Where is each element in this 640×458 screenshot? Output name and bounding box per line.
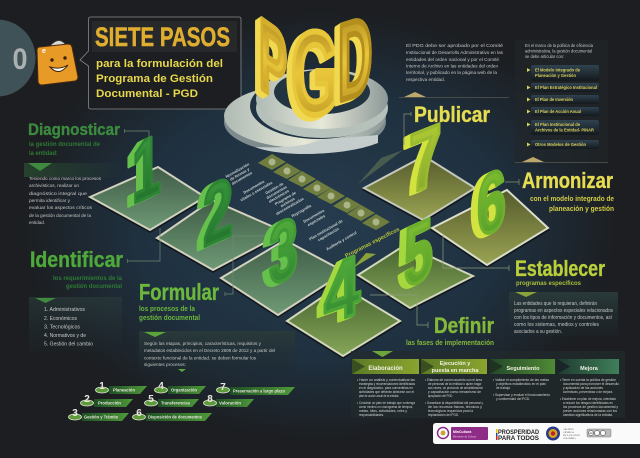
labels: specific programs: documentos	[265, 184, 288, 200]
step 4: Definir: Definir	[434, 313, 494, 338]
panel: establecer: Las entidades que lo requieran, definirán	[514, 301, 597, 307]
panel: formular	[139, 331, 295, 372]
panel: articulation list: Archivos de la Entidad- PINAR	[535, 128, 594, 132]
panel: articulation list: Otros Modelos de Gestión	[535, 142, 586, 147]
step 2: Identificar: Identificar	[30, 247, 123, 272]
step 7: Publicar	[404, 102, 490, 145]
process tags: 8	[207, 394, 213, 405]
panel: articulation list: administrativa, la gestión documental	[525, 48, 592, 54]
logo: Prosperidad para todos: PARA TODOS	[498, 435, 540, 442]
process tags: Valoración	[219, 400, 241, 406]
logo: Prosperidad para todos: PROSPERIDAD	[498, 429, 539, 436]
logo: Archivo General: ARCHIVO	[563, 428, 574, 431]
column: Elaboracion: Elaboración	[368, 366, 403, 372]
text block: approval: Interno de Archivo en las entidades del orden	[406, 64, 498, 68]
labels: specific programs: documentos	[230, 170, 253, 186]
column: Mejora: • Tener en cuenta la política de gestión	[560, 378, 616, 382]
column: Seguimiento: y objetivos establecidos en el plan	[496, 382, 546, 386]
process tags: Planeación	[113, 388, 135, 392]
panel: zero circle: 0	[12, 43, 28, 76]
subtitle: Documental - PGD	[96, 88, 198, 100]
process tags: Organización	[171, 388, 197, 392]
logo: Archivo General: GENERAL	[563, 431, 575, 434]
subtitle: Programa de Gestión	[96, 73, 213, 85]
process tags: 3	[72, 408, 78, 419]
column: Mejora	[557, 359, 619, 417]
process tags	[68, 381, 295, 421]
logo: Creative Commons	[587, 429, 611, 437]
heading: PGD gold letters: G	[291, 7, 339, 139]
panel: articulation list: El Plan de Inversión	[535, 97, 573, 102]
number 7: 7	[409, 105, 442, 212]
labels: specific programs: Plan institucional de	[308, 218, 344, 241]
number 5: 5	[404, 200, 433, 307]
labels: specific programs: vitales o esenciales	[239, 180, 273, 202]
column: Mejora: documental para promover el desarrollo	[563, 382, 619, 386]
column: Elaboracion: estrategias y recomendaciones identificadas	[359, 382, 415, 386]
panel: diagnosticar: archivísticos, realizar un	[29, 183, 79, 188]
column: Ejecucion: implantación del PGD.	[428, 413, 459, 417]
process tags: Producción	[98, 400, 121, 406]
text block: approval: entidades del orden nacional y por el Comité	[406, 57, 499, 62]
plate 4	[285, 285, 402, 359]
column: Mejora: • Establecer un plan de mejora, orientado	[560, 397, 616, 401]
column: Ejecucion: sus veces, un protocolo de sensibilización	[428, 386, 483, 390]
text block: approval: respectiva entidad.	[406, 77, 445, 82]
logo: Archivo General	[546, 426, 580, 440]
column: Seguimiento: • Validar el cumplimiento de las metas	[493, 378, 549, 382]
labels: specific programs: Programa de	[274, 190, 298, 206]
panel: establecer: con los tipos de información y documentos, así	[514, 315, 613, 321]
panel: establecer	[509, 292, 618, 336]
panel: formular: contexto funcional de la entidad, se deben formular los	[144, 356, 257, 360]
column: Mejora: a reducir los riesgos identificados en	[563, 401, 613, 405]
panel: diagnosticar: de la gestión documental de la	[29, 213, 91, 218]
labels: specific programs: Gestión de	[264, 181, 285, 195]
column: Elaboracion	[352, 359, 419, 417]
column: Seguimiento: Seguimiento	[506, 366, 540, 372]
labels: specific programs: Documentos	[242, 179, 265, 195]
subtitle: para la formulación del	[96, 58, 223, 70]
panel: formular: Según las etapas, principios, características, requisitos y	[144, 341, 262, 346]
labels: specific programs: capacitación	[317, 226, 340, 242]
process tags: 7	[220, 382, 226, 393]
step 4: Definir	[370, 295, 494, 347]
number 3: 3	[269, 198, 298, 305]
labels: specific programs	[224, 161, 401, 268]
panel: zero circle	[0, 20, 36, 96]
number 2: 2	[203, 159, 233, 266]
column: Ejecucion: de personal de la entidad o quien haga	[428, 382, 481, 386]
subtitle	[96, 58, 223, 100]
labels: specific programs: electrónicos	[268, 188, 290, 204]
column: Ejecucion: de los recursos físicos, técnicos y	[428, 405, 482, 409]
panel: articulation list: El Modelo Integrado de	[535, 68, 581, 72]
labels: specific programs: descentralizados	[275, 196, 305, 216]
icon: PGD ring	[224, 69, 388, 154]
labels: specific programs: Auditoría y control	[325, 230, 357, 252]
step 5: Establecer: Establecer	[515, 256, 605, 281]
step 3: Formular: los procesos de la	[139, 306, 195, 313]
step 2: Identificar	[29, 228, 265, 352]
panel: articulation list: El Plan Estratégico Institucional	[535, 85, 597, 90]
step 1: Diagnosticar	[24, 120, 149, 225]
column: Elaboracion: plan de acción anual de la entidad.	[359, 394, 399, 398]
column: Elaboracion: en el diagnóstico, para convertirlas en	[359, 386, 413, 390]
process tags: Transferencias	[161, 400, 191, 406]
callout: title box	[80, 17, 241, 109]
icon strip: eight process tiles	[258, 154, 390, 230]
plate 1	[88, 167, 207, 233]
panel: identificar list: 4. Normativos y de	[44, 333, 86, 339]
panel: identificar list: 3. Tecnológicos	[44, 324, 80, 330]
translucent pointer 7	[358, 150, 403, 184]
step 5: Establecer	[443, 235, 618, 336]
step 5: Establecer: programas específicos	[516, 280, 581, 287]
labels: specific programs: archivos	[279, 196, 296, 208]
process tags: 1	[99, 381, 105, 392]
plate 7	[362, 156, 477, 223]
logo: MinCultura: MinCultura	[453, 430, 471, 434]
column: Seguimiento: de trabajo.	[496, 386, 511, 390]
plate 6	[430, 190, 550, 268]
text block: approval: El PDG debe ser aprobado por el Comité	[406, 43, 504, 48]
panel: diagnosticar: permita identificar y	[29, 198, 71, 203]
column: Ejecucion: y capacitación como mecanismo de	[428, 390, 481, 394]
step 7: Publicar: Publicar	[414, 102, 490, 127]
column: Ejecucion: puesta en marcha	[432, 368, 479, 374]
panel: diagnosticar	[24, 163, 119, 225]
panel: diagnosticar: evaluar los aspectos críticos	[29, 205, 93, 210]
step 2: Identificar: los requerimientos de la	[53, 276, 123, 282]
column: Ejecucion	[421, 359, 487, 417]
logo: Prosperidad para todos	[496, 429, 540, 442]
panel: articulation list: Planeación y Gestión	[535, 73, 576, 78]
panel: articulation list: En el marco de la política de eficiencia	[525, 43, 594, 48]
column: Elaboracion: responsabilidades.	[359, 413, 384, 417]
process tags: Preservación a largo plazo	[233, 388, 285, 394]
panel: diagnosticar: entidad.	[29, 220, 45, 225]
step 2: Identificar: gestión documental	[66, 284, 122, 290]
panel: formular: siguientes procesos:	[144, 362, 186, 367]
process tags: 4	[158, 381, 164, 392]
step 6: Armonizar: con el modelo integrado de	[530, 196, 614, 203]
column: Ejecucion: • Elaborar de común acuerdo con el área	[425, 378, 482, 382]
plate 3	[219, 240, 347, 318]
heading: PGD gold letters	[259, 0, 372, 139]
column: Mejora: y aplicación de las acciones	[563, 386, 603, 390]
process tags: Disposición de documentos	[148, 414, 203, 420]
process tags: 2	[84, 394, 90, 405]
column: Elaboracion: • Construir un plan de trabajo que contenga	[357, 401, 415, 405]
step 6: Armonizar: Armonizar	[522, 168, 613, 193]
step 4: Definir: las fases de implementación	[406, 340, 494, 347]
logo: MinCultura	[438, 427, 488, 440]
column: Seguimiento: • Supervisar y evaluar el funcionamiento	[493, 393, 550, 397]
step 1: Diagnosticar: la entidad:	[29, 151, 58, 157]
panel: articulation list	[515, 40, 608, 163]
plate 5	[356, 245, 475, 311]
column: Ejecucion: • Garantizar la disponibilidad del personal y	[425, 401, 483, 405]
text block: approval: Institucional de Desarrollo Administrativo en las	[406, 50, 504, 55]
column: Mejora: prever acciones relacionadas con los	[563, 409, 617, 413]
labels: specific programs: Reprografía	[291, 203, 313, 218]
text block: approval: territorial, y publicado en la página web de la	[406, 70, 497, 75]
step 6: Armonizar: planeación y gestión	[549, 206, 614, 213]
title: SIETE PASOS	[95, 22, 230, 52]
column: Elaboracion: actividades que deberán alinearse con el	[359, 390, 414, 394]
divider marker: approval	[399, 92, 509, 98]
logo: Archivo General: COLOMBIA	[563, 437, 576, 440]
column: Mejora: cambios significativos de la entidad.	[563, 413, 613, 417]
panel: diagnosticar: Teniendo como marco los procesos	[29, 176, 102, 181]
step 1: Diagnosticar: Diagnosticar	[28, 120, 120, 139]
panel: identificar list	[29, 297, 122, 352]
step 3: Formular: gestión documental	[139, 315, 200, 322]
column: Seguimiento	[490, 359, 555, 401]
column: Ejecucion: apropiación del PGD.	[428, 394, 453, 398]
logo: Archivo General: DE LA NACIÓN	[563, 434, 580, 437]
step 3: Formular	[139, 236, 295, 372]
step 3: Formular: Formular	[139, 279, 219, 305]
process tags: Gestión y Trámite	[84, 414, 119, 420]
labels: specific programs: Normalización	[224, 161, 251, 179]
text block: approval	[406, 43, 504, 82]
column: Ejecucion: tecnológicos requeridos para la	[428, 409, 473, 413]
column: Mejora: los procesos de gestión documental y	[563, 405, 618, 409]
column: Ejecucion: Ejecución y	[440, 361, 471, 367]
panel: identificar list: 5. Gestión del cambio	[44, 342, 93, 348]
step 6: Armonizar	[505, 168, 614, 213]
panel: articulation list: se debe articular con:	[525, 54, 564, 59]
column: Elaboracion: • Hacer un análisis y contextualizar las	[357, 378, 415, 382]
labels: specific programs: Documentos	[302, 208, 325, 224]
labels: specific programs: especiales	[306, 213, 326, 227]
panel: establecer: como los sistemas, medios y controles	[514, 322, 599, 328]
number 4: 4	[324, 237, 361, 344]
number 1: 1	[132, 116, 161, 223]
panel: identificar list: 1. Administrativos	[44, 307, 85, 313]
step 1: Diagnosticar: la gestión documental de	[29, 142, 101, 148]
panel: articulation list: El Plan de Acción Anual	[535, 109, 581, 114]
plate 2	[155, 200, 287, 273]
label: programas especificos: Programas específicos	[344, 227, 401, 259]
process tags: 5	[148, 394, 154, 405]
icon: smiling folder bag: e	[42, 48, 46, 55]
logo: MinCultura: Ministerio de Cultura	[453, 436, 477, 438]
panel: establecer: programas en aspectos especiales relacionados	[514, 308, 613, 314]
panel: establecer: asociados a su gestión.	[514, 329, 562, 335]
column: Elaboracion: como mínimo un cronograma de tiempos,	[359, 405, 413, 409]
panel: implementation phases	[351, 351, 625, 418]
logo: Creative Commons: cc	[590, 431, 593, 435]
process tags: 6	[136, 408, 142, 419]
panel: formular: metadatos establecidos en el Decreto 2609 de 2012 y a partir del	[144, 348, 275, 353]
panel: articulation list: El Plan Institucional de	[535, 122, 581, 127]
column: Mejora: Mejora	[580, 366, 599, 372]
icon: smiling folder bag	[37, 40, 78, 85]
labels: specific programs: de formas y	[229, 166, 251, 182]
panel: diagnosticar: diagnóstico integral que	[29, 191, 88, 196]
panel: identificar list: 2. Económicos	[44, 316, 77, 322]
number 6: 6	[477, 150, 506, 257]
column: Mejora: correctivas, preventivas o de mejora.	[563, 390, 613, 394]
column: Elaboracion: metas, hitos, actividades, roles y	[359, 409, 407, 413]
column: Seguimiento: y conformidad del PGD.	[496, 397, 530, 401]
footer logos bar	[433, 423, 640, 444]
